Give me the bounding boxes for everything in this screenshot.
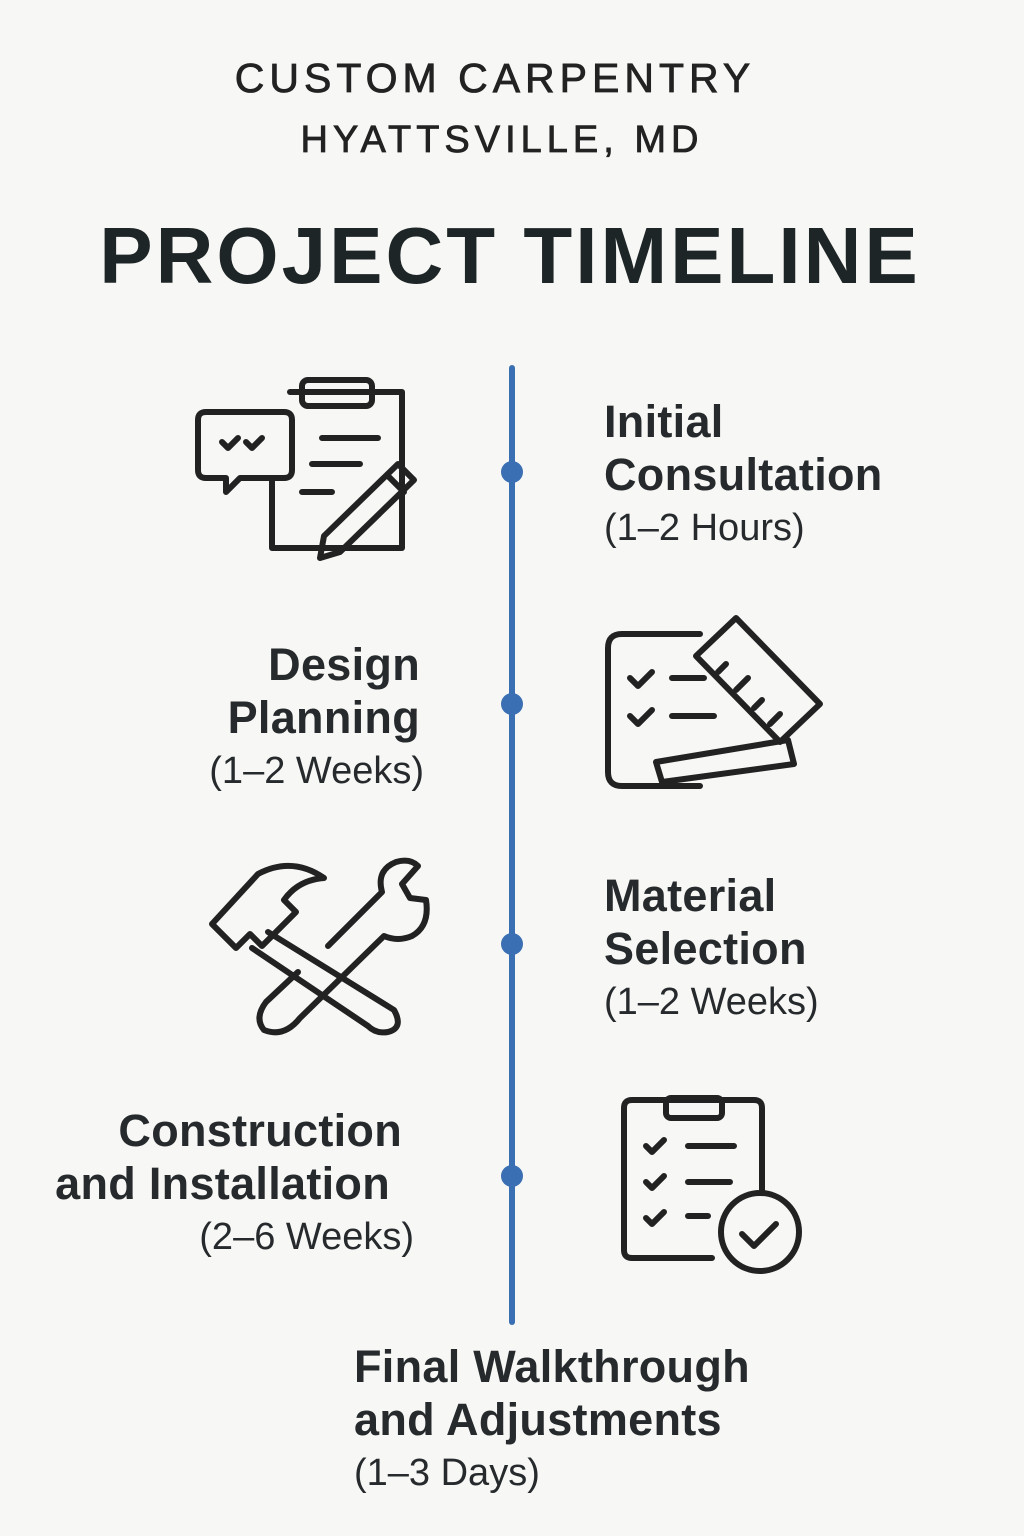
step 3 text: material selection: (1–2 Weeks) — [604, 981, 819, 1023]
step 5 text: final walkthrough: (1–3 Days) — [354, 1452, 540, 1494]
step 2 text: design planning: (1–2 Weeks) — [209, 750, 424, 792]
step 4 text: construction and installation: (2–6 Weeks) — [199, 1216, 414, 1258]
step 1 text: initial consultation: Consultation — [604, 449, 883, 500]
step 1 text: initial consultation: Initial — [604, 396, 724, 447]
step 1 text: initial consultation — [604, 396, 883, 549]
step 2 text: design planning — [209, 639, 424, 792]
step 3 text: material selection: Selection — [604, 923, 807, 974]
step 4 text: construction and installation — [55, 1105, 414, 1258]
step 3 text: material selection: Material — [604, 870, 776, 921]
step 2 text: design planning: Planning — [228, 692, 420, 743]
step 5 text: final walkthrough: Final Walkthrough — [354, 1341, 750, 1392]
step 1 text: initial consultation: (1–2 Hours) — [604, 507, 805, 549]
title: custom carpentry: CUSTOM CARPENTRY — [235, 55, 755, 101]
subtitle: location: HYATTSVILLE, MD — [300, 119, 704, 161]
step 2 text: design planning: Design — [268, 639, 420, 690]
step 4 text: construction and installation: and Installation — [55, 1158, 390, 1209]
heading: project timeline: PROJECT TIMELINE — [99, 211, 921, 300]
step 3 text: material selection — [604, 870, 819, 1023]
step 4 text: construction and installation: Construction — [118, 1105, 402, 1156]
step 5 text: final walkthrough: and Adjustments — [354, 1394, 722, 1445]
step 5 text: final walkthrough — [354, 1341, 750, 1494]
